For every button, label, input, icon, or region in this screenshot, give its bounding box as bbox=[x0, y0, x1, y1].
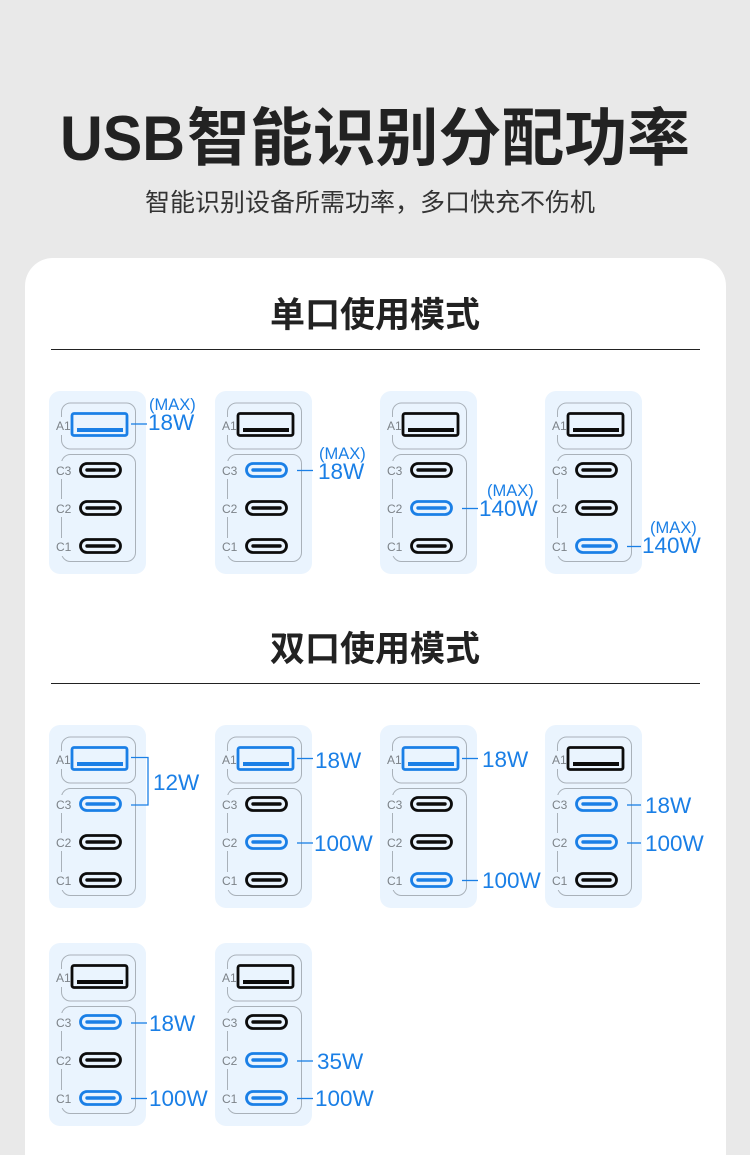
charger: single C3 18W: C1 bbox=[222, 540, 238, 554]
charger: dual A1 18W + C2 100W: C2 bbox=[222, 836, 238, 850]
charger: dual A1 18W + C2 100W: 100W bbox=[314, 831, 374, 856]
charger: single C2 140W bbox=[380, 391, 539, 574]
charger: dual C3 18W + C1 100W: C1 bbox=[56, 1092, 72, 1106]
charger: single C1 140W: A1 bbox=[552, 419, 567, 433]
charger: dual A1 18W + C1 100W: C3 bbox=[387, 798, 403, 812]
charger: dual C3 18W + C2 100W bbox=[545, 725, 705, 908]
charger: dual A1 18W + C2 100W bbox=[215, 725, 374, 908]
charger: dual C2 35W + C1 100W: A1 bbox=[222, 971, 237, 985]
charger: dual A1 18W + C1 100W: 100W bbox=[482, 868, 542, 893]
charger: single C2 140W: C2 bbox=[387, 502, 403, 516]
title: USB bbox=[60, 104, 185, 174]
charger: dual C3 18W + C2 100W: 100W bbox=[645, 831, 705, 856]
charger: single C3 18W: (MAX) bbox=[319, 445, 366, 463]
charger: single C2 140W: (MAX) bbox=[487, 482, 534, 500]
charger: dual C3 18W + C2 100W: C1 bbox=[552, 874, 568, 888]
charger: dual A1 + C3 12W: C3 bbox=[56, 798, 72, 812]
charger: single C1 140W bbox=[545, 391, 702, 574]
charger: dual C2 35W + C1 100W: C3 bbox=[222, 1016, 238, 1030]
charger: single C2 140W: 140W bbox=[479, 496, 539, 521]
charger: single C3 18W bbox=[215, 391, 366, 574]
charger: single C3 18W: C3 bbox=[222, 464, 238, 478]
charger: dual C2 35W + C1 100W: 35W bbox=[317, 1049, 364, 1074]
charger: dual C2 35W + C1 100W: 100W bbox=[315, 1086, 375, 1111]
charger: dual A1 18W + C1 100W: 18W bbox=[482, 747, 529, 772]
charger: dual A1 18W + C2 100W: C1 bbox=[222, 874, 238, 888]
charger: single C2 140W: A1 bbox=[387, 419, 402, 433]
charger: dual A1 + C3 12W: C2 bbox=[56, 836, 72, 850]
heading: dual port mode: 双口使用模式 bbox=[270, 630, 480, 669]
charger: dual A1 18W + C2 100W: C3 bbox=[222, 798, 238, 812]
charger: single A1 18W: C2 bbox=[56, 502, 72, 516]
charger: dual C3 18W + C2 100W: 18W bbox=[645, 793, 692, 818]
charger: dual C3 18W + C1 100W: A1 bbox=[56, 971, 71, 985]
charger: single C3 18W: 18W bbox=[318, 459, 365, 484]
title: 智能识别分配功率 bbox=[187, 104, 690, 174]
charger: dual A1 18W + C1 100W: A1 bbox=[387, 753, 402, 767]
charger: dual A1 18W + C1 100W: C2 bbox=[387, 836, 403, 850]
charger: dual C2 35W + C1 100W: C1 bbox=[222, 1092, 238, 1106]
charger: single C1 140W: C1 bbox=[552, 540, 568, 554]
charger: dual A1 18W + C2 100W: A1 bbox=[222, 753, 237, 767]
charger: dual C2 35W + C1 100W bbox=[215, 943, 375, 1126]
charger: dual A1 + C3 12W: A1 bbox=[56, 753, 71, 767]
charger: single A1 18W: 18W bbox=[148, 410, 195, 435]
charger: dual A1 18W + C1 100W bbox=[380, 725, 542, 908]
charger: dual A1 18W + C2 100W: 18W bbox=[315, 748, 362, 773]
charger: dual A1 + C3 12W: 12W bbox=[153, 770, 200, 795]
charger: single C1 140W: C2 bbox=[552, 502, 568, 516]
charger: single C1 140W: (MAX) bbox=[650, 519, 697, 537]
charger: dual C3 18W + C1 100W: 18W bbox=[149, 1011, 196, 1036]
charger: single C2 140W: C3 bbox=[387, 464, 403, 478]
charger: single A1 18W bbox=[49, 391, 196, 574]
charger: single C1 140W: C3 bbox=[552, 464, 568, 478]
charger: single A1 18W: C3 bbox=[56, 464, 72, 478]
charger: single C3 18W: C2 bbox=[222, 502, 238, 516]
charger: dual A1 + C3 12W: C1 bbox=[56, 874, 72, 888]
charger: dual C3 18W + C1 100W: 100W bbox=[149, 1086, 209, 1111]
panel: white card bbox=[25, 258, 726, 1155]
charger: single A1 18W: C1 bbox=[56, 540, 72, 554]
charger: dual C3 18W + C2 100W: C2 bbox=[552, 836, 568, 850]
charger: dual C3 18W + C1 100W bbox=[49, 943, 209, 1126]
charger: single A1 18W: (MAX) bbox=[149, 396, 196, 414]
subtitle: 智能识别设备所需功率，多口快充不伤机 bbox=[145, 189, 595, 217]
charger: single C2 140W: C1 bbox=[387, 540, 403, 554]
charger: single C3 18W: A1 bbox=[222, 419, 237, 433]
charger: single C1 140W: 140W bbox=[642, 533, 702, 558]
charger: dual C3 18W + C2 100W: C3 bbox=[552, 798, 568, 812]
charger: dual A1 18W + C1 100W: C1 bbox=[387, 874, 403, 888]
charger: dual C3 18W + C1 100W: C3 bbox=[56, 1016, 72, 1030]
charger: dual C3 18W + C2 100W: A1 bbox=[552, 753, 567, 767]
charger: dual C3 18W + C1 100W: C2 bbox=[56, 1054, 72, 1068]
charger: single A1 18W: A1 bbox=[56, 419, 71, 433]
charger: dual C2 35W + C1 100W: C2 bbox=[222, 1054, 238, 1068]
charger: dual A1 + C3 12W bbox=[49, 725, 200, 908]
heading: single port mode: 单口使用模式 bbox=[270, 296, 480, 335]
